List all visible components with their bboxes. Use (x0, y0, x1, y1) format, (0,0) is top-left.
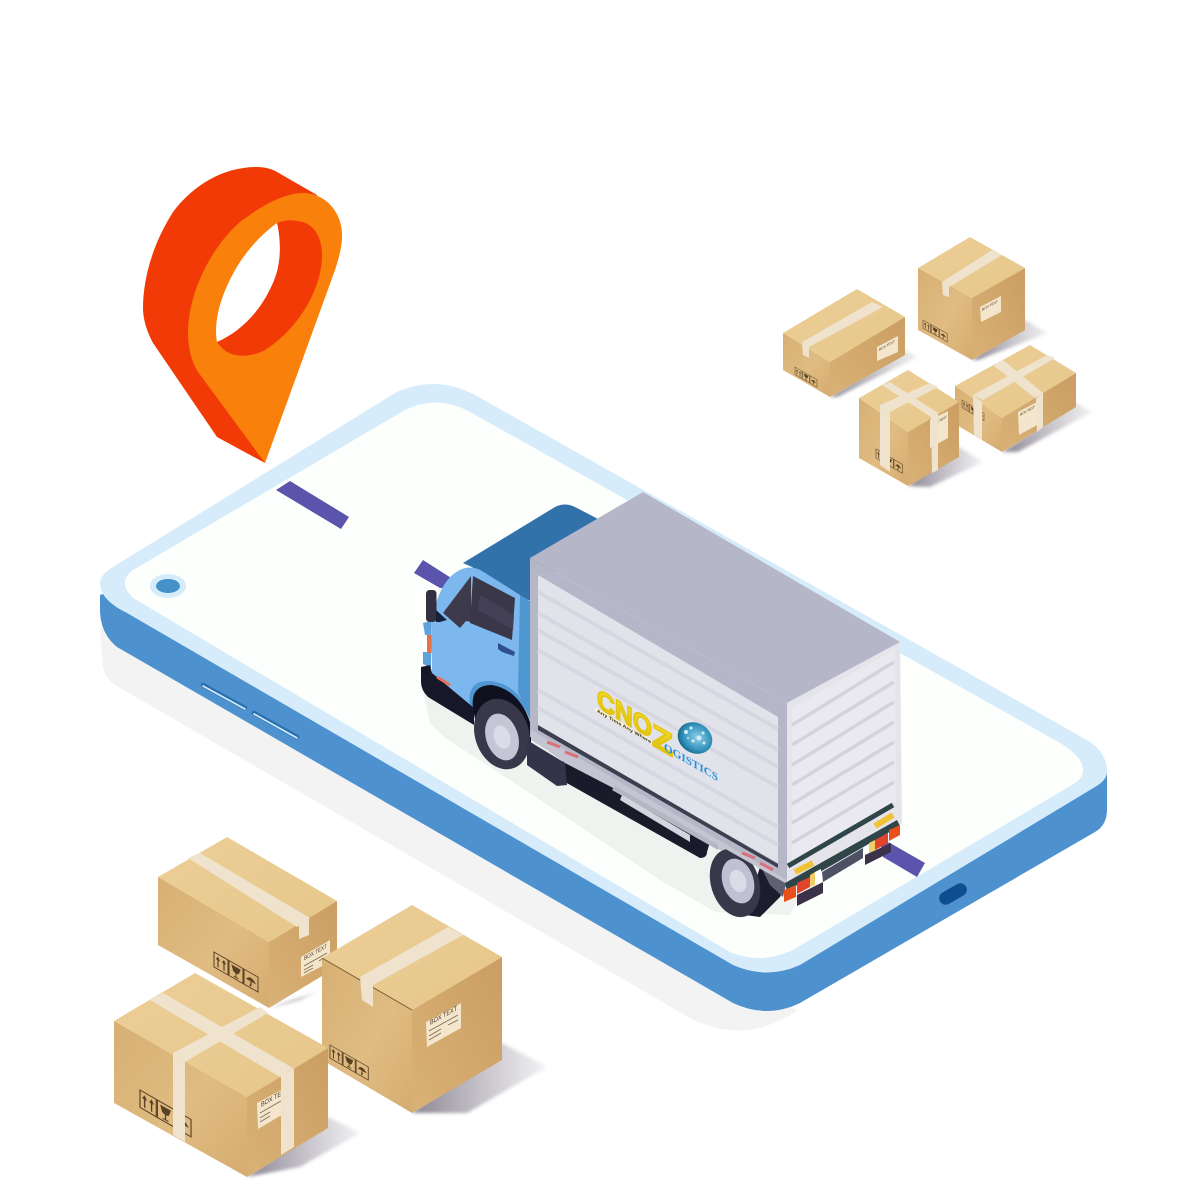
side panel ribs (538, 592, 778, 845)
front marker light (437, 677, 450, 685)
delivery truck (421, 492, 902, 924)
cargo box side (530, 558, 787, 884)
door handle (498, 643, 515, 656)
shipping label: BOX TEXT (261, 1085, 288, 1109)
rear bumper bar (785, 820, 900, 891)
shipping label: BOX TEXT (430, 1003, 457, 1027)
box shadows (830, 320, 1092, 487)
box cluster: top right (783, 237, 1092, 487)
truck ground shadow (423, 690, 800, 915)
side skirt (531, 735, 787, 883)
front wheel (465, 691, 539, 777)
side mirror (426, 590, 447, 622)
phone side body (100, 500, 1107, 1011)
cargo box rear (787, 642, 902, 883)
parcel: tall bottom with cross tape (859, 370, 959, 486)
smartphone (100, 384, 1107, 1011)
cab body (431, 568, 520, 714)
front wheel arch (473, 685, 531, 748)
company logo (595, 684, 718, 784)
lower rail (538, 725, 778, 868)
right tail lights (864, 825, 900, 865)
phone bezel (100, 384, 1107, 973)
camera lens (150, 574, 186, 598)
parcel: long right with cross tape (955, 345, 1076, 452)
logo tagline: Any Time Any Where (597, 708, 651, 745)
phone ground shadow (100, 600, 797, 1030)
rear door bar (788, 805, 893, 866)
cab roof (463, 504, 600, 600)
pin hole opening (216, 223, 280, 342)
parcel: tall top: BOX TEXT (982, 299, 999, 312)
cab front lamp panels (423, 621, 431, 668)
location pin (143, 167, 342, 463)
wheel arch rim (469, 681, 531, 725)
cab windows (443, 576, 515, 640)
charging port (937, 881, 969, 907)
side toolbox rail (612, 783, 718, 850)
logo wordmark: CNO (597, 684, 652, 745)
logo wordmark: Z (652, 717, 673, 765)
parcel: tall bottom with cross tape: BOX TEXT (932, 415, 948, 427)
parcel: long left (783, 289, 905, 397)
shipping label (257, 1085, 288, 1129)
front mudguard frame (527, 740, 567, 786)
shipping label (426, 1003, 461, 1047)
rear reflectors (795, 815, 893, 872)
parcel: long right with cross tape: BOX TEXT (1020, 405, 1036, 417)
front bumper (421, 665, 474, 725)
parcel: long back (158, 837, 337, 1008)
rear wheel (701, 842, 787, 924)
rear panel ribs (792, 662, 894, 843)
logo wordmark (597, 684, 673, 765)
shipping label (301, 940, 330, 977)
underrun frame (822, 848, 863, 882)
logo word logistics: OGISTICS (664, 740, 718, 784)
side marker lights (547, 742, 773, 870)
left tail lights (784, 869, 823, 906)
pin side (143, 167, 317, 463)
cargo box roof (530, 492, 900, 703)
cab rear strip (518, 595, 532, 725)
phone screen (125, 402, 1083, 958)
logo globe (672, 716, 718, 760)
box shadows (247, 967, 547, 1177)
amber side lamp (427, 635, 432, 653)
box cluster: bottom left (114, 837, 547, 1177)
road dashes on the screen (276, 481, 925, 877)
parcel: cube right (322, 905, 502, 1113)
side volume buttons (203, 685, 297, 738)
shipping label: BOX TEXT (304, 943, 327, 962)
parcel: tall top (918, 237, 1025, 360)
parcel: long left: BOX TEXT (879, 339, 896, 352)
parcel: long front with cross tape (114, 973, 328, 1177)
chassis (560, 745, 712, 858)
pin face (188, 193, 342, 463)
pin hole inner wall (217, 220, 322, 356)
